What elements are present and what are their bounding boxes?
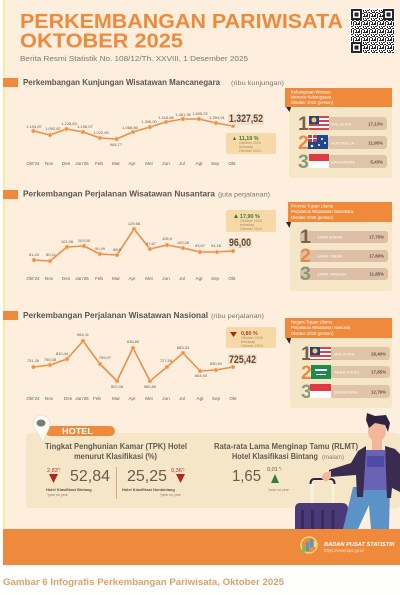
line chart: nasional: Jun xyxy=(162,396,170,401)
line chart: nasional: 759,07 xyxy=(99,355,112,360)
title: PERKEMBANGAN PARIWISATA xyxy=(20,10,343,33)
line chart: nusantara: 101,06 xyxy=(61,239,74,244)
illustration: traveller with suitcase xyxy=(295,413,400,529)
line chart: nusantara: Agt xyxy=(196,276,203,281)
TPK bintang: 52,84 xyxy=(70,468,110,485)
rank row: Australia: 2 xyxy=(298,132,309,154)
line chart: nasional: Okt'24 xyxy=(26,396,40,401)
callout: nusantara change: 17,90 % xyxy=(240,214,260,220)
line chart: nusantara: 105,9 xyxy=(162,236,173,241)
line chart: nasional: 731,26 xyxy=(27,358,40,363)
line chart: mancanegara: Agt xyxy=(196,161,203,166)
line chart: nasional: Mei xyxy=(145,396,153,401)
head xyxy=(368,423,386,440)
line chart: mancanegara: 964,77 xyxy=(110,142,123,147)
line chart: nusantara: Okt xyxy=(228,276,236,281)
hand xyxy=(321,471,331,482)
line chart: mancanegara: Jul xyxy=(179,161,185,166)
line chart: nusantara: 94,16 xyxy=(211,243,222,248)
rank row: Malaysia xyxy=(301,343,390,365)
line chart: nusantara: 103,00 xyxy=(78,238,91,243)
line chart: nusantara: 97,67 xyxy=(146,241,157,246)
TPK bintang: 2,83 xyxy=(47,468,58,474)
panel: negara tujuan: Perjalanan Wisatawan Nasional, xyxy=(291,325,351,330)
line chart: nasional: 883,33 xyxy=(177,345,190,350)
TPK nonbintang: Hotel Klasifikasi Nonbintang xyxy=(122,487,175,492)
callout: nusantara change: Oktober 2025 xyxy=(240,219,262,223)
line chart: mancanegara: Apr xyxy=(128,161,136,166)
rank row: Jawa Barat: 17,75% xyxy=(369,234,384,240)
caption: Gambar 6 Infografis Perkembangan Pariwisata, Oktober 2025 xyxy=(3,577,284,587)
callout: nusantara change: Oktober 2024 xyxy=(240,227,262,231)
rank row: Malaysia: MALAYSIA xyxy=(331,122,352,126)
TPK bintang xyxy=(46,468,110,497)
line chart: nasional: Agt xyxy=(197,396,204,401)
section heading: nasional: Perkembangan Perjalanan Wisatawan Nasional xyxy=(23,310,208,320)
line chart: nasional: Nov xyxy=(45,396,54,401)
line chart: nusantara xyxy=(26,221,252,281)
TPK bintang: *year on year xyxy=(47,493,69,497)
logo: BPS: https://www.bps.go.id xyxy=(324,548,364,553)
rank row: Jawa Tengah: JAWA TENGAH xyxy=(317,272,346,276)
RLMT value: 0,01 xyxy=(267,467,278,473)
line chart: nusantara: Jun xyxy=(162,276,170,281)
rank row: Jawa Timur xyxy=(300,245,388,267)
callout: nasional change: 0,80 % xyxy=(241,331,258,337)
line chart: nasional: 664,93 xyxy=(195,373,208,378)
TPK heading xyxy=(45,442,187,461)
line chart: nusantara: Apr xyxy=(128,276,136,281)
callout: mancanegara change: 11,19 % xyxy=(239,136,259,142)
line chart: nasional: 984,11 xyxy=(77,332,90,337)
section heading: nusantara: Perkembangan Perjalanan Wisatawan Nusantara xyxy=(23,188,215,198)
line chart: nasional: 580,80 xyxy=(144,384,157,389)
RLMT heading: Rata-rata Lama Menginap Tamu (RLMT) xyxy=(214,442,358,451)
line chart: mancanegara: Des xyxy=(62,161,71,166)
line chart: nasional: 725,42 xyxy=(229,354,256,366)
line chart: mancanegara: 1.415,86 xyxy=(158,115,175,120)
line chart: nasional: 836,80 xyxy=(127,339,140,344)
line chart: nasional: Des xyxy=(64,396,73,401)
panel: provinsi tujuan: Perjalanan Wisatawan Nusantara, xyxy=(291,209,354,214)
line chart: mancanegara: Feb xyxy=(95,161,103,166)
rank row: Singapura xyxy=(301,381,390,403)
panel: kebangsaan wisman: Menurut Kebangsaan, xyxy=(291,94,332,100)
line chart: nusantara: Jul xyxy=(179,276,185,281)
line chart: mancanegara: Jun xyxy=(162,161,170,166)
footer band xyxy=(3,529,400,565)
panel: negara tujuan xyxy=(285,318,392,408)
line chart: nusantara: 100,26 xyxy=(177,240,190,245)
line chart: mancanegara: 1.022,89 xyxy=(93,130,110,135)
rank row: Jawa Barat xyxy=(300,226,388,248)
rank row: Australia: AUSTRALIA xyxy=(331,140,354,146)
line chart: nasional: Apr xyxy=(128,396,136,401)
hotel pill label xyxy=(45,426,115,436)
callout: mancanegara change: Oktober 2024 xyxy=(239,149,261,153)
TPK heading: Tingkat Penghunian Kamar (TPK) Hotel xyxy=(45,442,187,451)
rank row: Malaysia: 1 xyxy=(298,113,309,135)
line chart: nusantara: 81,43 xyxy=(29,252,40,257)
rank row: Singapura: SINGAPURA xyxy=(334,390,358,394)
line chart: nasional: 750,08 xyxy=(44,357,57,362)
RLMT heading: Hotel Klasifikasi Bintang xyxy=(232,452,318,461)
rank row: Malaysia: MALAYSIA xyxy=(334,352,355,356)
rank row: Jawa Timur: 17,60% xyxy=(369,254,384,258)
callout: nasional change: terhadap xyxy=(241,340,255,344)
line chart: nasional: 690,91 xyxy=(210,361,223,366)
suitcase xyxy=(295,503,348,529)
panel: provinsi tujuan: Provinsi Tujuan Utama xyxy=(291,204,334,208)
hair xyxy=(366,413,390,432)
rank row: Arab Saudi xyxy=(301,362,390,384)
panel: hotel xyxy=(26,433,400,508)
RLMT value: *year on year xyxy=(268,488,290,492)
line chart: mancanegara: Okt'24 xyxy=(26,161,40,166)
line chart: nasional: Jul xyxy=(179,396,185,401)
rank row: Jawa Barat: JAWA BARAT xyxy=(317,234,344,240)
rank row: Arab Saudi: 2 xyxy=(301,362,312,384)
rank row: Jawa Tengah xyxy=(300,263,388,285)
line chart: nasional: Sep xyxy=(212,396,221,401)
section heading: mancanegara: Perkembangan Kunjungan Wisatawan Mancanegara xyxy=(23,77,220,87)
line chart: nusantara: Feb xyxy=(95,276,103,281)
line chart: mancanegara: 1.156,07 xyxy=(77,124,94,129)
panel: provinsi tujuan xyxy=(286,202,392,291)
rank row: Jawa Tengah: 11,85% xyxy=(369,272,384,276)
rank row: Arab Saudi: ARAB SAUDI xyxy=(334,370,359,374)
line chart: mancanegara: 1.306,00 xyxy=(141,119,158,124)
line chart: nasional: 502,08 xyxy=(111,384,124,389)
RLMT value xyxy=(232,466,290,492)
TPK heading: menurut Klasifikasi (%) xyxy=(74,452,157,461)
TPK bintang: *) xyxy=(58,468,60,472)
section heading: mancanegara: (ribu kunjungan) xyxy=(231,81,284,87)
line chart: mancanegara: Jan'25 xyxy=(75,161,89,166)
line chart: mancanegara: 1.193,87 xyxy=(26,124,43,129)
line chart: nusantara: Sep xyxy=(211,276,220,281)
line chart: nusantara: 90,49 xyxy=(95,246,106,251)
rank row: Singapura xyxy=(298,151,387,173)
line chart: nasional: Feb xyxy=(93,396,101,401)
rank row: Malaysia: 28,40% xyxy=(371,352,386,356)
QR code xyxy=(350,8,395,54)
RLMT value: *) xyxy=(278,466,281,470)
TPK nonbintang: *) xyxy=(182,468,184,472)
panel: provinsi tujuan: Oktober 2025 (persen) xyxy=(291,215,334,220)
section heading: nusantara xyxy=(3,188,270,199)
rank row: Singapura: 3 xyxy=(301,381,312,403)
line chart: mancanegara: 1.481,35 xyxy=(175,112,192,117)
callout: mancanegara change: Oktober 2025 xyxy=(239,141,261,145)
line chart: nasional xyxy=(26,332,257,401)
line chart: nusantara: 96,00 xyxy=(229,237,251,249)
rank row: Malaysia: 17,13% xyxy=(368,122,383,126)
callout: nasional change: Oktober 2025 xyxy=(241,336,263,340)
line chart: mancanegara xyxy=(26,111,264,166)
section heading: nasional: (ribu perjalanan) xyxy=(211,314,264,320)
subtitle: Berita Resmi Statistik No. 108/12/Th. XXVIII, 1 Desember 2025 xyxy=(20,54,248,63)
line chart: mancanegara: 1.394,91 xyxy=(209,115,226,120)
line chart: mancanegara: 1.068,56 xyxy=(122,125,139,130)
panel: kebangsaan wisman xyxy=(285,88,392,178)
TPK bintang: Hotel Klasifikasi Bintang xyxy=(46,487,92,492)
line chart: nasional: Jan'25 xyxy=(75,396,89,401)
line chart: nasional: Mar xyxy=(112,396,120,401)
section heading: nusantara: (juta perjalanan) xyxy=(218,192,270,198)
RLMT heading: (malam) xyxy=(322,455,344,461)
callout: mancanegara change xyxy=(226,133,276,154)
hotel pill label: HOTEL xyxy=(62,427,93,436)
rank row: Jawa Barat: 1 xyxy=(300,226,311,248)
rank row: Singapura: 5,43% xyxy=(371,160,383,164)
rank row: Singapura: SINGAPURA xyxy=(331,160,355,164)
rank row: Malaysia xyxy=(298,113,387,135)
line chart: mancanegara: 1.228,63 xyxy=(61,121,78,126)
callout: nusantara change: terhadap xyxy=(240,223,254,227)
RLMT heading xyxy=(214,442,358,461)
line chart: nasional: 727,58 xyxy=(160,358,173,363)
rank row: Australia: 11,95% xyxy=(368,140,383,146)
line chart: nusantara: Mei xyxy=(145,276,153,281)
RLMT value: 1,65 xyxy=(232,468,261,485)
callout: mancanegara change: terhadap xyxy=(239,145,253,149)
line chart: mancanegara: Okt xyxy=(228,161,236,166)
rank row: Malaysia: 1 xyxy=(301,343,312,365)
panel: kebangsaan wisman: Kebangsaan Wisman xyxy=(291,90,331,94)
panel: kebangsaan wisman: Oktober 2025 (persen) xyxy=(291,100,334,105)
line chart: mancanegara: Sep xyxy=(211,161,220,166)
TPK nonbintang: 0,36 xyxy=(171,468,182,474)
rank row: Jawa Timur: JAWA TIMUR xyxy=(317,254,342,258)
line chart: nusantara: Nov xyxy=(45,276,54,281)
suitcase handle xyxy=(312,479,333,505)
callout: nasional change xyxy=(226,327,276,348)
line chart: nusantara: 80,41 xyxy=(46,252,57,257)
line chart: nusantara: 129,58 xyxy=(128,221,141,226)
callout: nusantara change xyxy=(226,210,276,232)
line chart: mancanegara: Nov xyxy=(45,161,54,166)
title: OKTOBER 2025 xyxy=(20,30,183,52)
TPK nonbintang xyxy=(122,468,185,497)
line chart: mancanegara: Mei xyxy=(145,161,153,166)
line chart: nasional: 810,44 xyxy=(56,351,69,356)
title xyxy=(20,10,343,52)
TPK nonbintang: *year on year xyxy=(160,493,182,497)
line chart: nusantara: 88,9 xyxy=(113,247,122,252)
icon: location pin xyxy=(33,415,50,444)
line chart: nusantara: Okt'24 xyxy=(26,276,40,281)
TPK nonbintang: 25,25 xyxy=(127,468,167,485)
rank row: Jawa Timur: 2 xyxy=(300,245,311,267)
logo: BPS: BADAN PUSAT STATISTIK xyxy=(324,542,395,548)
line chart: mancanegara: 1.092,87 xyxy=(45,126,62,131)
rank row: Arab Saudi: 17,85% xyxy=(371,370,386,374)
line chart: mancanegara: 1.327,52 xyxy=(229,113,263,125)
line chart: nusantara: Jan'25 xyxy=(75,276,89,281)
line chart: mancanegara: Mar xyxy=(112,161,120,166)
rank row: Australia xyxy=(298,132,387,154)
legs xyxy=(343,487,390,529)
callout: nasional change: Oktober 2024 xyxy=(241,344,263,348)
logo: BPS xyxy=(301,537,395,553)
line chart: nusantara: Mar xyxy=(112,276,120,281)
torso xyxy=(356,450,389,490)
rank row: Singapura: 3 xyxy=(298,151,309,173)
panel: negara tujuan: Oktober 2025 (persen) xyxy=(291,331,334,336)
line chart: mancanegara: 1.505,22 xyxy=(192,111,209,116)
rank row: Singapura: 12,79% xyxy=(371,390,386,394)
panel: negara tujuan: Negara Tujuan Utama xyxy=(291,320,333,324)
neck xyxy=(372,440,382,450)
line chart: nasional: Okt xyxy=(229,396,237,401)
rank row: Jawa Tengah: 3 xyxy=(300,263,311,285)
line chart: nusantara: 93,67 xyxy=(195,243,206,248)
line chart: nusantara: Des xyxy=(62,276,71,281)
jacket xyxy=(329,446,400,498)
